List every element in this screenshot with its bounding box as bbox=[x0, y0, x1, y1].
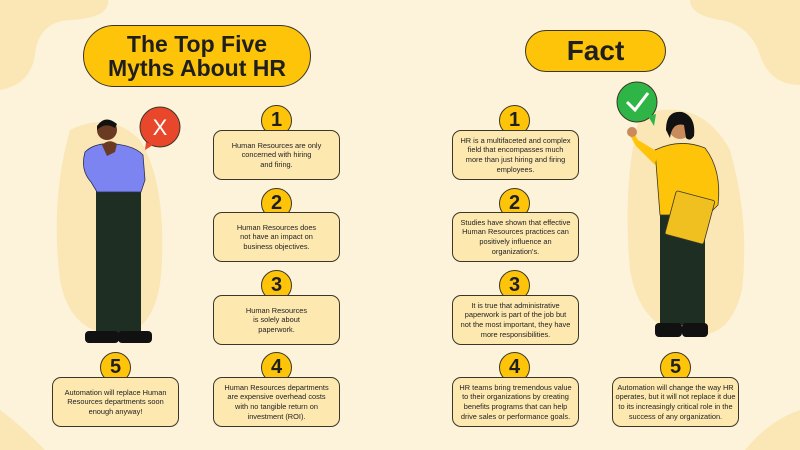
text: and firing. bbox=[260, 160, 293, 169]
text: 2 bbox=[509, 192, 520, 214]
title bbox=[83, 25, 311, 87]
fact 5 bbox=[612, 352, 739, 427]
fact 1 bbox=[452, 105, 579, 180]
icon: red X bubble: X bbox=[153, 115, 168, 140]
text: Human Resources does bbox=[237, 223, 316, 232]
myth 1 bbox=[213, 105, 340, 180]
text: Automation will replace Human Resources departments soon enough anyway! bbox=[65, 388, 166, 416]
text: paperwork. bbox=[258, 325, 295, 334]
fact 2 bbox=[452, 188, 579, 262]
text: Automation will change the way HR bbox=[617, 383, 734, 392]
text: HR teams bring tremendous value to their organizations by creating benefits programs that can help drive sales or performance goals. bbox=[459, 383, 572, 421]
heading: Fact: Fact bbox=[567, 35, 624, 66]
text: 5 bbox=[670, 356, 681, 378]
text: 3 bbox=[509, 274, 520, 296]
myth 4 bbox=[213, 352, 340, 427]
myth 2 bbox=[213, 188, 340, 262]
text: 3 bbox=[271, 274, 282, 296]
text: 5 bbox=[110, 356, 121, 378]
myth 5 bbox=[52, 352, 179, 427]
text: Human Resources are only concerned with hiring bbox=[232, 141, 321, 159]
text: 1 bbox=[271, 109, 282, 131]
text: to its increasingly critical role in the bbox=[618, 402, 733, 411]
text: 1 bbox=[509, 109, 520, 131]
title: Myths About HR bbox=[108, 55, 286, 81]
text: operates, but it will not replace it due bbox=[616, 392, 735, 401]
icon: red X bubble bbox=[140, 107, 180, 150]
text: business objectives. bbox=[243, 242, 310, 251]
text: not have an impact on bbox=[240, 232, 313, 241]
text: Studies have shown that effective Human Resources practices can positively influence an organization's. bbox=[460, 218, 570, 256]
heading: Fact bbox=[525, 30, 666, 72]
illustration: woman with check bbox=[616, 82, 720, 337]
text: 4 bbox=[271, 356, 282, 378]
illustration: thinking man with X bbox=[83, 106, 180, 343]
text: 2 bbox=[271, 192, 282, 214]
text: 4 bbox=[509, 356, 520, 378]
fact 3 bbox=[452, 270, 579, 345]
text: HR is a multifaceted and complex field that encompasses much more than just hiring and firing employees. bbox=[460, 136, 571, 174]
text: success of any organization. bbox=[629, 412, 722, 421]
fact 4 bbox=[452, 352, 579, 427]
icon: green check bubble bbox=[617, 82, 657, 126]
text: is solely about bbox=[253, 315, 300, 324]
title: The Top Five bbox=[127, 31, 267, 57]
text: Human Resources bbox=[246, 306, 307, 315]
myth 3 bbox=[213, 270, 340, 345]
text: It is true that administrative paperwork is part of the job but not the most important, they have more responsibilities. bbox=[461, 301, 570, 339]
text: Human Resources departments are expensive overhead costs with no tangible return on investment (ROI). bbox=[224, 383, 329, 421]
